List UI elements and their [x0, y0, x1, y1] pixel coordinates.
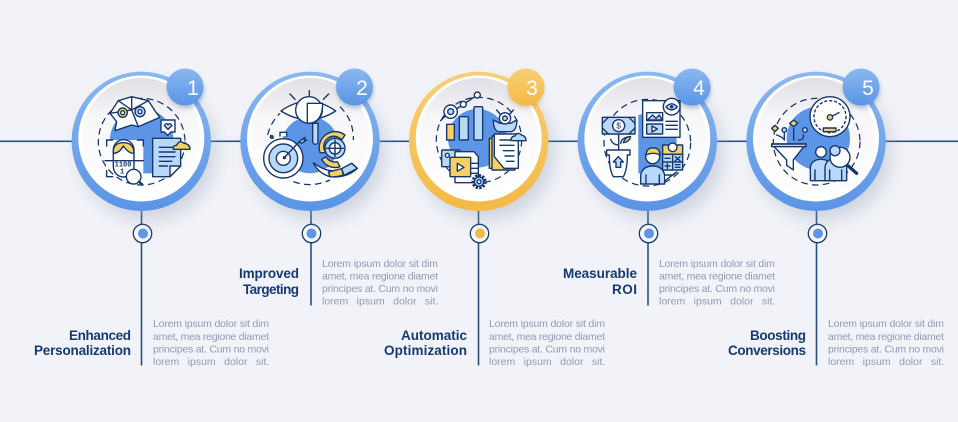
badge 5: [842, 68, 880, 108]
label: Boosting Conversions: [728, 328, 806, 358]
label: Measurable ROI: [563, 266, 637, 297]
badge 4: [674, 68, 711, 108]
text block 1: lorem ipsum dolor sit.: [153, 356, 269, 368]
step 5: [746, 68, 891, 366]
icon: ROI: $: [616, 121, 621, 131]
text block 3: [489, 318, 605, 368]
shadow 2: [249, 84, 385, 220]
icon: personalization: 1100: [115, 162, 131, 170]
text block 4: Lorem ipsum dolor sit dim: [659, 258, 775, 270]
text block 5: [828, 318, 944, 368]
marker 1: [133, 224, 152, 243]
connector 1: [140, 205, 142, 366]
label: Measurable ROI: Measurable: [563, 266, 637, 281]
timeline: [0, 140, 958, 142]
text block 1: principes at. Cum no movi: [153, 344, 269, 356]
shadow 5: [755, 84, 891, 220]
text block 5: lorem ipsum dolor sit.: [828, 356, 944, 368]
text block 1: [153, 318, 269, 368]
step 1: [72, 68, 216, 366]
ring 3: [409, 72, 548, 211]
label: Boosting Conversions: Conversions: [728, 343, 806, 358]
shadow 3: [418, 84, 554, 220]
icon: targeting: [264, 91, 357, 185]
text block 1: amet, mea regione diamet: [153, 331, 269, 343]
text block 2: lorem ipsum dolor sit.: [322, 296, 438, 308]
shadow 4: [587, 84, 723, 220]
label: Improved Targeting: Improved: [239, 266, 299, 281]
connector 3: [478, 205, 480, 366]
text block 4: lorem ipsum dolor sit.: [659, 296, 775, 308]
text block 2: [322, 258, 438, 308]
badge 3: 3: [526, 77, 538, 100]
connector 2: [310, 205, 312, 306]
icon: conversions: [772, 97, 860, 185]
icon: ROI: [602, 98, 691, 186]
badge 3: [508, 68, 544, 108]
badge 1: 1: [187, 77, 199, 100]
text block 5: principes at. Cum no movi: [828, 344, 944, 356]
ring 2: [240, 72, 380, 211]
ring 1: [72, 72, 211, 211]
step 3: [409, 68, 554, 366]
badge 2: 2: [356, 77, 368, 100]
step 4: [578, 68, 723, 306]
marker 4: [639, 224, 658, 243]
icon: personalization: [98, 97, 190, 185]
label: Boosting Conversions: Boosting: [750, 328, 806, 343]
label: Automatic Optimization: [384, 328, 467, 358]
label: Enhanced Personalization: Enhanced: [69, 328, 131, 343]
label: Improved Targeting: Targeting: [243, 282, 299, 297]
text block 2: principes at. Cum no movi: [322, 283, 438, 295]
label: Enhanced Personalization: [34, 328, 131, 358]
label: Automatic Optimization: Optimization: [384, 343, 467, 358]
text block 4: amet, mea regione diamet: [659, 270, 775, 282]
step 2: [240, 68, 385, 306]
label: Measurable ROI: ROI: [612, 282, 637, 297]
text block 3: principes at. Cum no movi: [489, 344, 605, 356]
text block 4: [659, 258, 775, 308]
text block 1: Lorem ipsum dolor sit dim: [153, 318, 269, 330]
icon: personalization: 1: [120, 168, 124, 176]
marker 3: [470, 224, 489, 243]
text block 5: Lorem ipsum dolor sit dim: [828, 318, 944, 330]
icon: optimization: [436, 92, 526, 188]
text block 2: amet, mea regione diamet: [322, 270, 438, 282]
badge 2: [336, 68, 373, 108]
badge 4: 4: [693, 77, 705, 100]
text block 3: Lorem ipsum dolor sit dim: [489, 318, 605, 330]
ring 5: [746, 72, 886, 211]
badge 1: [166, 68, 204, 108]
shadow 1: [80, 84, 216, 220]
marker 5: [808, 224, 827, 243]
label: Enhanced Personalization: Personalization: [34, 343, 131, 358]
text block 2: Lorem ipsum dolor sit dim: [322, 258, 438, 270]
badge 5: 5: [862, 77, 874, 100]
connector 4: [647, 205, 649, 306]
label: Automatic Optimization: Automatic: [401, 328, 467, 343]
text block 4: principes at. Cum no movi: [659, 283, 775, 295]
ring 4: [578, 72, 717, 211]
marker 2: [302, 224, 321, 243]
connector 5: [816, 205, 818, 366]
text block 3: amet, mea regione diamet: [489, 331, 605, 343]
text block 3: lorem ipsum dolor sit.: [489, 356, 605, 368]
text block 5: amet, mea regione diamet: [828, 331, 944, 343]
label: Improved Targeting: [239, 266, 299, 297]
